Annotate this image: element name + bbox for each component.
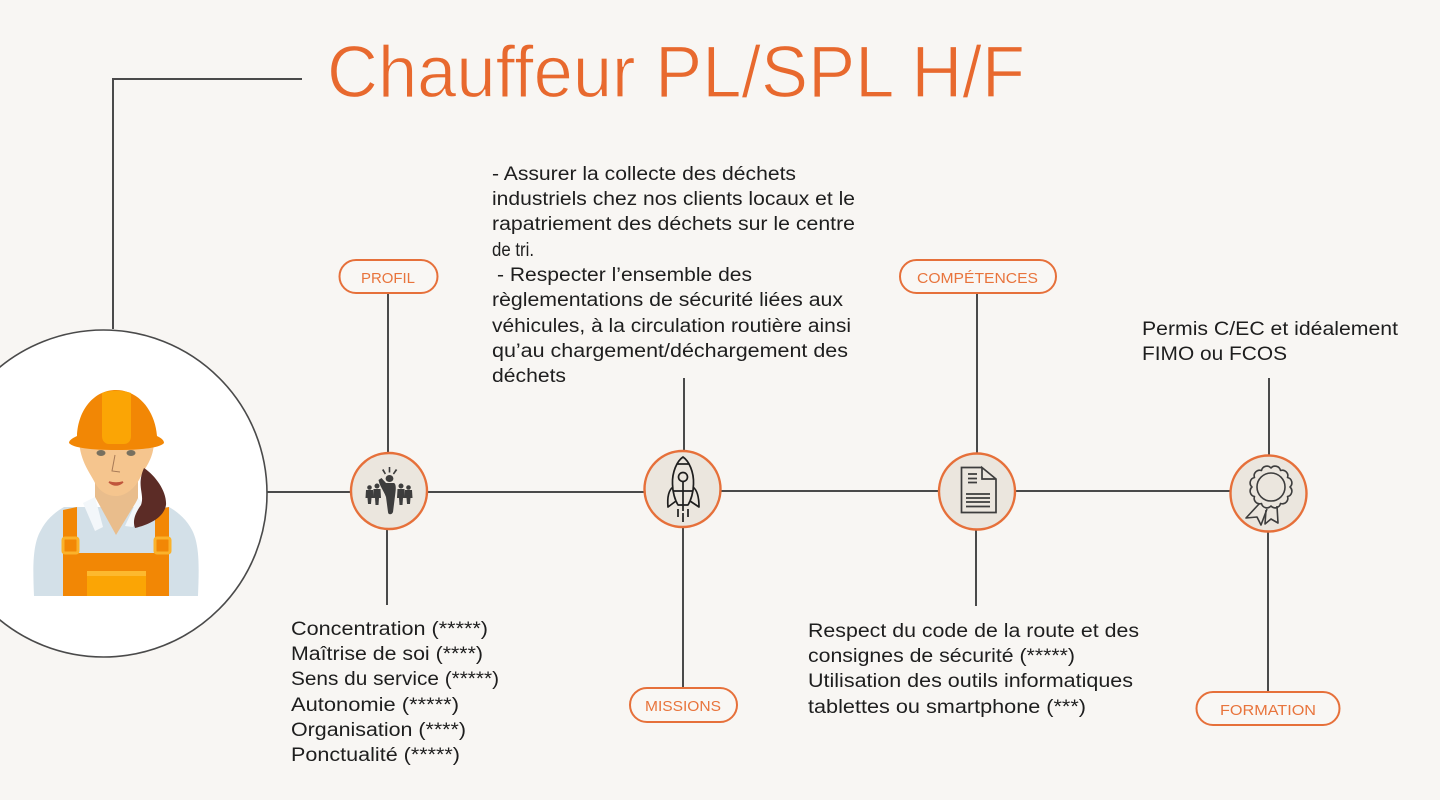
ponytail (134, 468, 166, 528)
node: competences (939, 454, 1015, 530)
helmet stripe (102, 391, 131, 444)
pill: profil: PROFIL (361, 270, 415, 287)
text block: missions: - Respecter l’ensemble des (497, 265, 752, 286)
face (79, 440, 154, 496)
text block: profil: Sens du service (*****) (291, 669, 499, 690)
body shirt (33, 507, 199, 596)
pill: formation: FORMATION (1220, 702, 1316, 719)
neck (95, 480, 138, 535)
buckles (63, 538, 170, 553)
text block: profil: Autonomie (*****) (291, 695, 459, 716)
text block: competences: Utilisation des outils informatiques (808, 671, 1133, 692)
text block: missions (492, 164, 855, 387)
icon: worker with helmet (33, 390, 199, 596)
text block: profil: Ponctualité (*****) (291, 745, 460, 766)
text block: missions: déchets (492, 366, 566, 387)
timeline connectors (267, 293, 1269, 692)
text block: formation: Permis C/EC et idéalement (1142, 319, 1399, 340)
text block: missions: véhicules, à la circulation routière ainsi (492, 316, 851, 337)
text block: missions: règlementations de sécurité liées aux (492, 290, 844, 311)
text block: profil: Concentration (*****) (291, 619, 488, 640)
node: profil (351, 453, 427, 529)
text block: formation: FIMO ou FCOS (1142, 344, 1287, 365)
node: missions (644, 451, 720, 527)
text block: competences: consignes de sécurité (*****) (808, 646, 1075, 667)
pill: formation (1196, 692, 1340, 725)
icon: document (962, 468, 996, 512)
text block: profil: Organisation (****) (291, 720, 466, 741)
text block: missions: de tri. (492, 240, 534, 261)
straps and bib (63, 507, 169, 596)
icon: leader and team (366, 467, 412, 514)
collar (83, 497, 145, 531)
helmet (69, 390, 164, 450)
text block: missions: - Assurer la collecte des déchets (492, 164, 796, 185)
text block: missions: industriels chez nos clients locaux et le (492, 189, 855, 210)
portrait circle (0, 330, 267, 657)
text block: formation (1142, 319, 1399, 365)
icon: award rosette (1246, 466, 1292, 525)
text block: competences (808, 621, 1139, 718)
text block: profil: Maîtrise de soi (****) (291, 644, 483, 665)
pill: competences: COMPÉTENCES (917, 270, 1038, 287)
text block: profil (291, 619, 499, 766)
pill: profil (340, 260, 438, 293)
text block: missions: qu’au chargement/déchargement des (492, 341, 848, 362)
eyes and mouth (96, 450, 136, 485)
text block: competences: Respect du code de la route et des (808, 621, 1139, 642)
node: formation (1230, 456, 1306, 532)
pocket (87, 571, 146, 596)
pill: missions: MISSIONS (645, 698, 721, 715)
pill: competences (900, 260, 1056, 293)
title: Chauffeur PL/SPL H/F (327, 32, 1025, 113)
text block: missions: rapatriement des déchets sur le centre (492, 214, 855, 235)
title connector line (113, 79, 302, 329)
icon: rocket (668, 457, 699, 522)
text block: competences: tablettes ou smartphone (***) (808, 697, 1086, 718)
pill: missions (630, 688, 737, 722)
